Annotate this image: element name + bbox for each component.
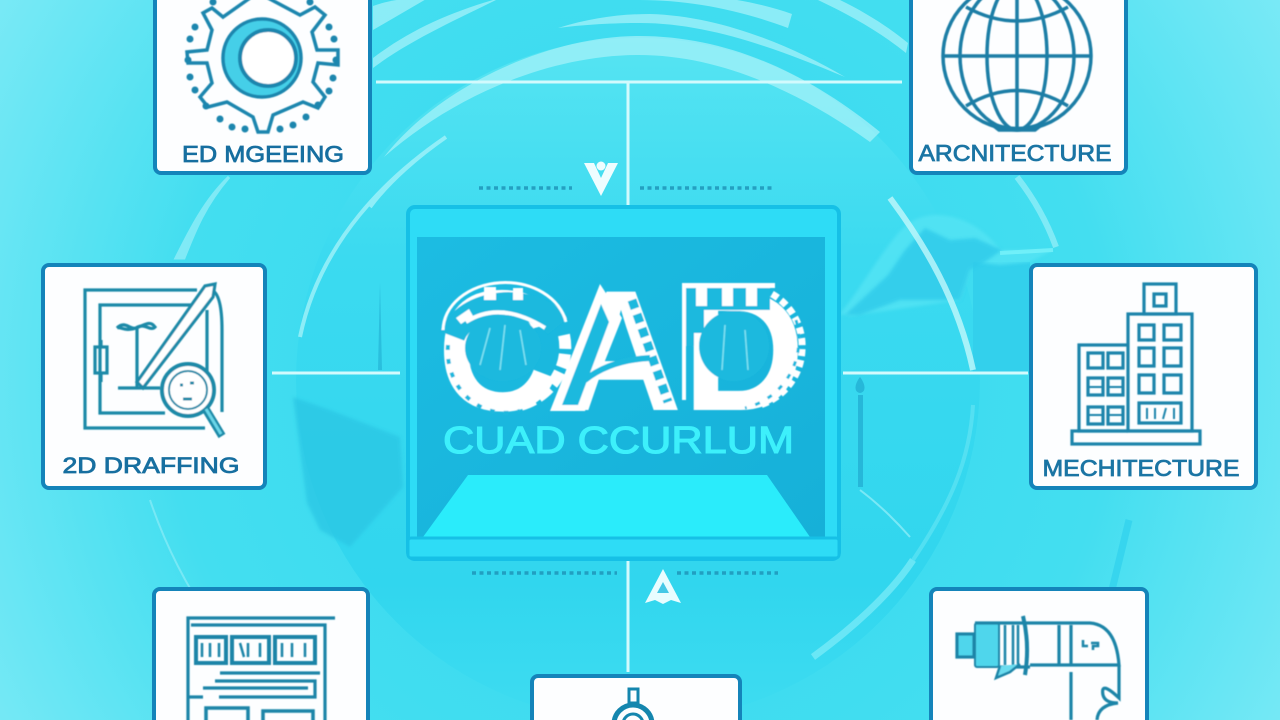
panel: bottom-left card xyxy=(154,589,368,720)
screen display xyxy=(417,237,825,547)
panel: central CAD screen xyxy=(408,207,839,559)
icon: pipe fitting xyxy=(957,616,1119,720)
panel: top-right card xyxy=(911,0,1126,173)
icon: valve xyxy=(614,689,652,720)
icon: blueprint sheet xyxy=(188,618,335,720)
icon: gear xyxy=(187,0,338,132)
icon: building xyxy=(1072,284,1200,444)
screen frame xyxy=(408,207,839,559)
frame bottom bar xyxy=(408,538,839,558)
icon: drafting board xyxy=(85,284,222,436)
background circle and arcs xyxy=(150,0,1129,720)
label: ARCNITECTURE xyxy=(918,140,1112,166)
panel: top-left card xyxy=(155,0,370,173)
dotted dividers xyxy=(472,188,778,573)
small vertical ticks xyxy=(378,283,864,487)
D gear detail xyxy=(682,284,770,310)
A detail xyxy=(550,284,622,411)
label: ED MGEEING xyxy=(182,141,344,167)
label: 2D DRAFFING xyxy=(62,453,240,478)
connector lines xyxy=(272,82,1028,672)
screen base trapezoid xyxy=(423,475,810,537)
panel: bottom-right card xyxy=(931,589,1147,720)
subtitle: CUAD CCURLUM xyxy=(443,420,794,462)
icon: bottom arrow xyxy=(645,569,681,604)
panel: bottom-center card xyxy=(532,676,740,720)
icon: globe xyxy=(943,0,1091,130)
icon: top chevron xyxy=(584,162,618,196)
label: MECHITECTURE xyxy=(1042,455,1240,481)
panel: 2D drafting card xyxy=(43,265,265,488)
panel: mechitecture card xyxy=(1031,265,1256,488)
C gear detail xyxy=(452,305,558,336)
CAD logo: CAD xyxy=(437,255,805,447)
